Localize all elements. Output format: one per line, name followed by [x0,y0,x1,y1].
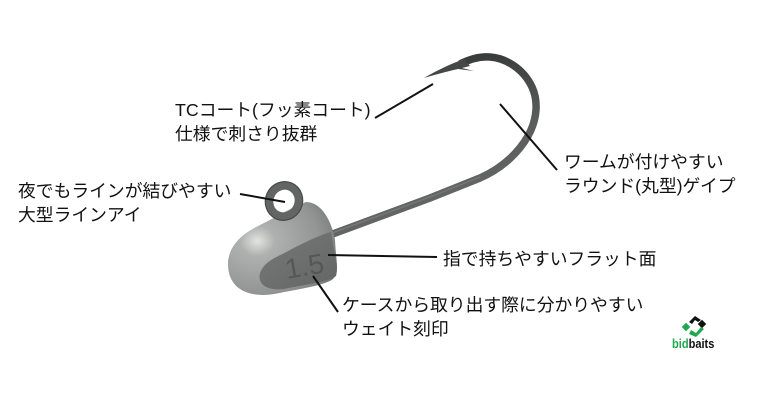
line eye ring [259,176,309,226]
logo: bidbaits [672,316,714,351]
hook shaft and bend [330,57,536,235]
callout: weight engraving: ウェイト刻印 [342,318,449,338]
leader lines [240,84,557,312]
logo wordmark: bidbaits [672,336,714,351]
callout: TC coat [175,100,371,144]
callout: weight engraving [342,295,643,338]
icon: logo mark [682,316,706,337]
callout: round gape: ワームが付けやすい [564,152,724,172]
callout: flat face: 指で持ちやすいフラット面 [443,249,656,269]
jig head weight [228,202,337,295]
callout: large line eye: 夜でもラインが結びやすい [18,181,231,201]
callout: TC coat: 仕様で刺さり抜群 [175,124,317,144]
callout: round gape [564,152,736,196]
callout: weight engraving: ケースから取り出す際に分かりやすい [342,295,643,315]
jig head weight: 1.5 [283,248,326,285]
callout: large line eye [18,181,231,224]
callout: TC coat: TCコート(フッ素コート) [175,100,371,120]
callout: large line eye: 大型ラインアイ [18,204,142,224]
flat face with weight engraving [260,232,337,289]
callout: round gape: ラウンド(丸型)ゲイプ [564,176,736,196]
